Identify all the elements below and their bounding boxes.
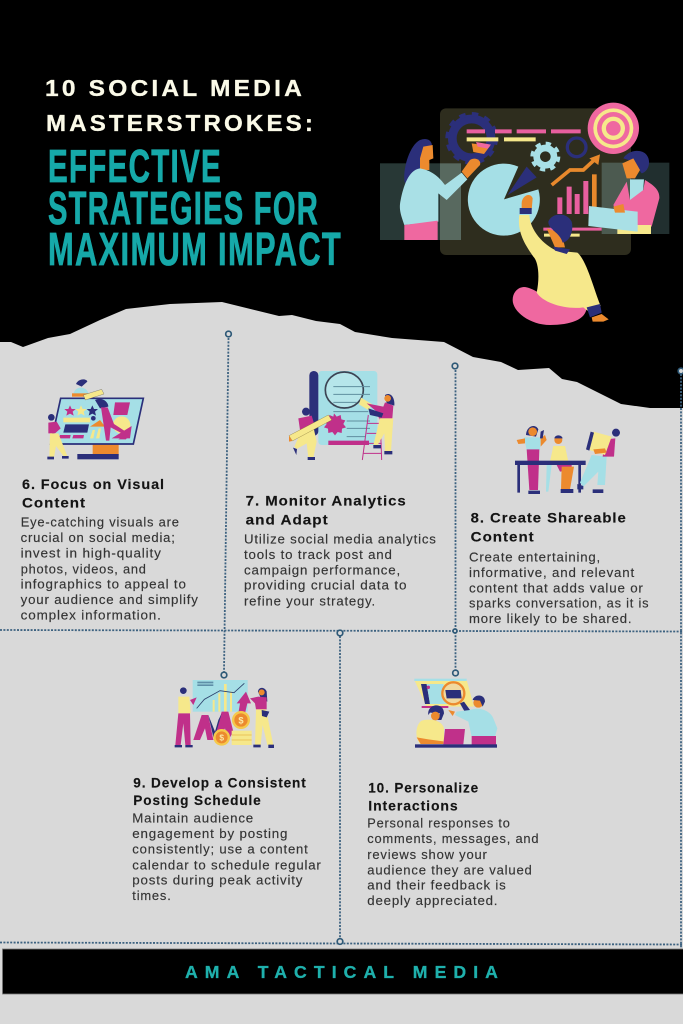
text block: photos, videos, and	[21, 561, 147, 576]
text block: comments, messages, and	[367, 831, 539, 846]
heading: Content	[471, 528, 535, 544]
panel: tip 6	[21, 379, 199, 622]
text block: tools to track post and	[244, 547, 393, 562]
text block: refine your strategy.	[244, 594, 376, 609]
text block: calendar to schedule regular	[132, 857, 322, 872]
text block: sparks conversation, as it is	[469, 596, 649, 611]
text block	[469, 550, 649, 626]
text block: Eye-catching visuals are	[21, 515, 180, 530]
text block: deeply appreciated.	[367, 893, 498, 908]
text block: crucial on social media;	[21, 530, 176, 545]
icon: growth chart and coins: $	[219, 732, 224, 742]
heading: 7. Monitor Analytics	[246, 493, 407, 509]
text block: Maintain audience	[132, 811, 254, 826]
footer banner: AMA TACTICAL MEDIA	[185, 962, 505, 982]
panel: tip 10	[367, 679, 539, 908]
text block	[367, 816, 539, 908]
title: MASTERSTROKES:	[46, 110, 316, 136]
heading: Content	[22, 495, 86, 511]
text block: Create entertaining,	[469, 550, 601, 565]
heading: Interactions	[368, 798, 459, 814]
text block: audience they are valued	[367, 862, 533, 877]
text block: your audience and simplify	[21, 592, 199, 607]
title	[45, 75, 342, 275]
left woman	[404, 139, 432, 185]
icon: growth chart and coins	[175, 680, 274, 748]
text block: more likely to be shared.	[469, 611, 632, 626]
text block: providing crucial data to	[244, 578, 407, 593]
right woman	[623, 151, 649, 173]
icon: magnifier over report	[289, 371, 394, 460]
text block: content that adds value or	[469, 580, 644, 595]
panel: tip 8	[469, 426, 649, 626]
text block: infographics to appeal to	[21, 577, 187, 592]
icon: personal interaction at laptop	[414, 679, 497, 748]
text block	[132, 811, 322, 903]
icon: monitor with creative team	[47, 379, 143, 459]
title: EFFECTIVE	[48, 140, 222, 192]
text block: consistently; use a content	[132, 841, 309, 856]
heading	[471, 510, 627, 544]
hero illustration: team around analytics dashboard	[380, 103, 669, 325]
heading: and Adapt	[246, 511, 329, 527]
panel: tip 7	[244, 371, 437, 609]
heading	[368, 780, 479, 814]
text block: and their feedback is	[367, 878, 507, 893]
text block: times.	[132, 888, 172, 903]
text block: informative, and relevant	[469, 565, 635, 580]
text block: invest in high-quality	[21, 545, 162, 560]
heading	[246, 493, 407, 527]
text block: campaign performance,	[244, 562, 401, 577]
text block	[21, 515, 199, 622]
text block: posts during peak activity	[132, 873, 303, 888]
text block	[244, 532, 437, 609]
heading: 9. Develop a Consistent	[133, 775, 307, 791]
heading	[22, 476, 165, 511]
heading: 10. Personalize	[368, 780, 479, 796]
dotted connector lines with rings	[0, 331, 683, 966]
seated man	[513, 287, 587, 325]
title: STRATEGIES FOR	[48, 182, 319, 234]
text block: complex information.	[21, 607, 162, 622]
text block: reviews show your	[367, 847, 488, 862]
heading: Posting Schedule	[133, 792, 262, 808]
title: 10 SOCIAL MEDIA	[45, 75, 305, 101]
text block: Utilize social media analytics	[244, 532, 437, 547]
panel: tip 9	[132, 680, 322, 903]
heading: 6. Focus on Visual	[22, 476, 165, 492]
heading	[133, 775, 307, 808]
icon: team sharing at a table	[515, 426, 620, 494]
black torn-paper header background	[0, 0, 683, 408]
title: MAXIMUM IMPACT	[48, 223, 342, 275]
footer banner	[2, 949, 683, 994]
text block: Personal responses to	[367, 816, 511, 831]
icon: growth chart and coins: $	[238, 715, 244, 725]
text block: engagement by posting	[132, 826, 288, 841]
heading: 8. Create Shareable	[471, 510, 627, 526]
